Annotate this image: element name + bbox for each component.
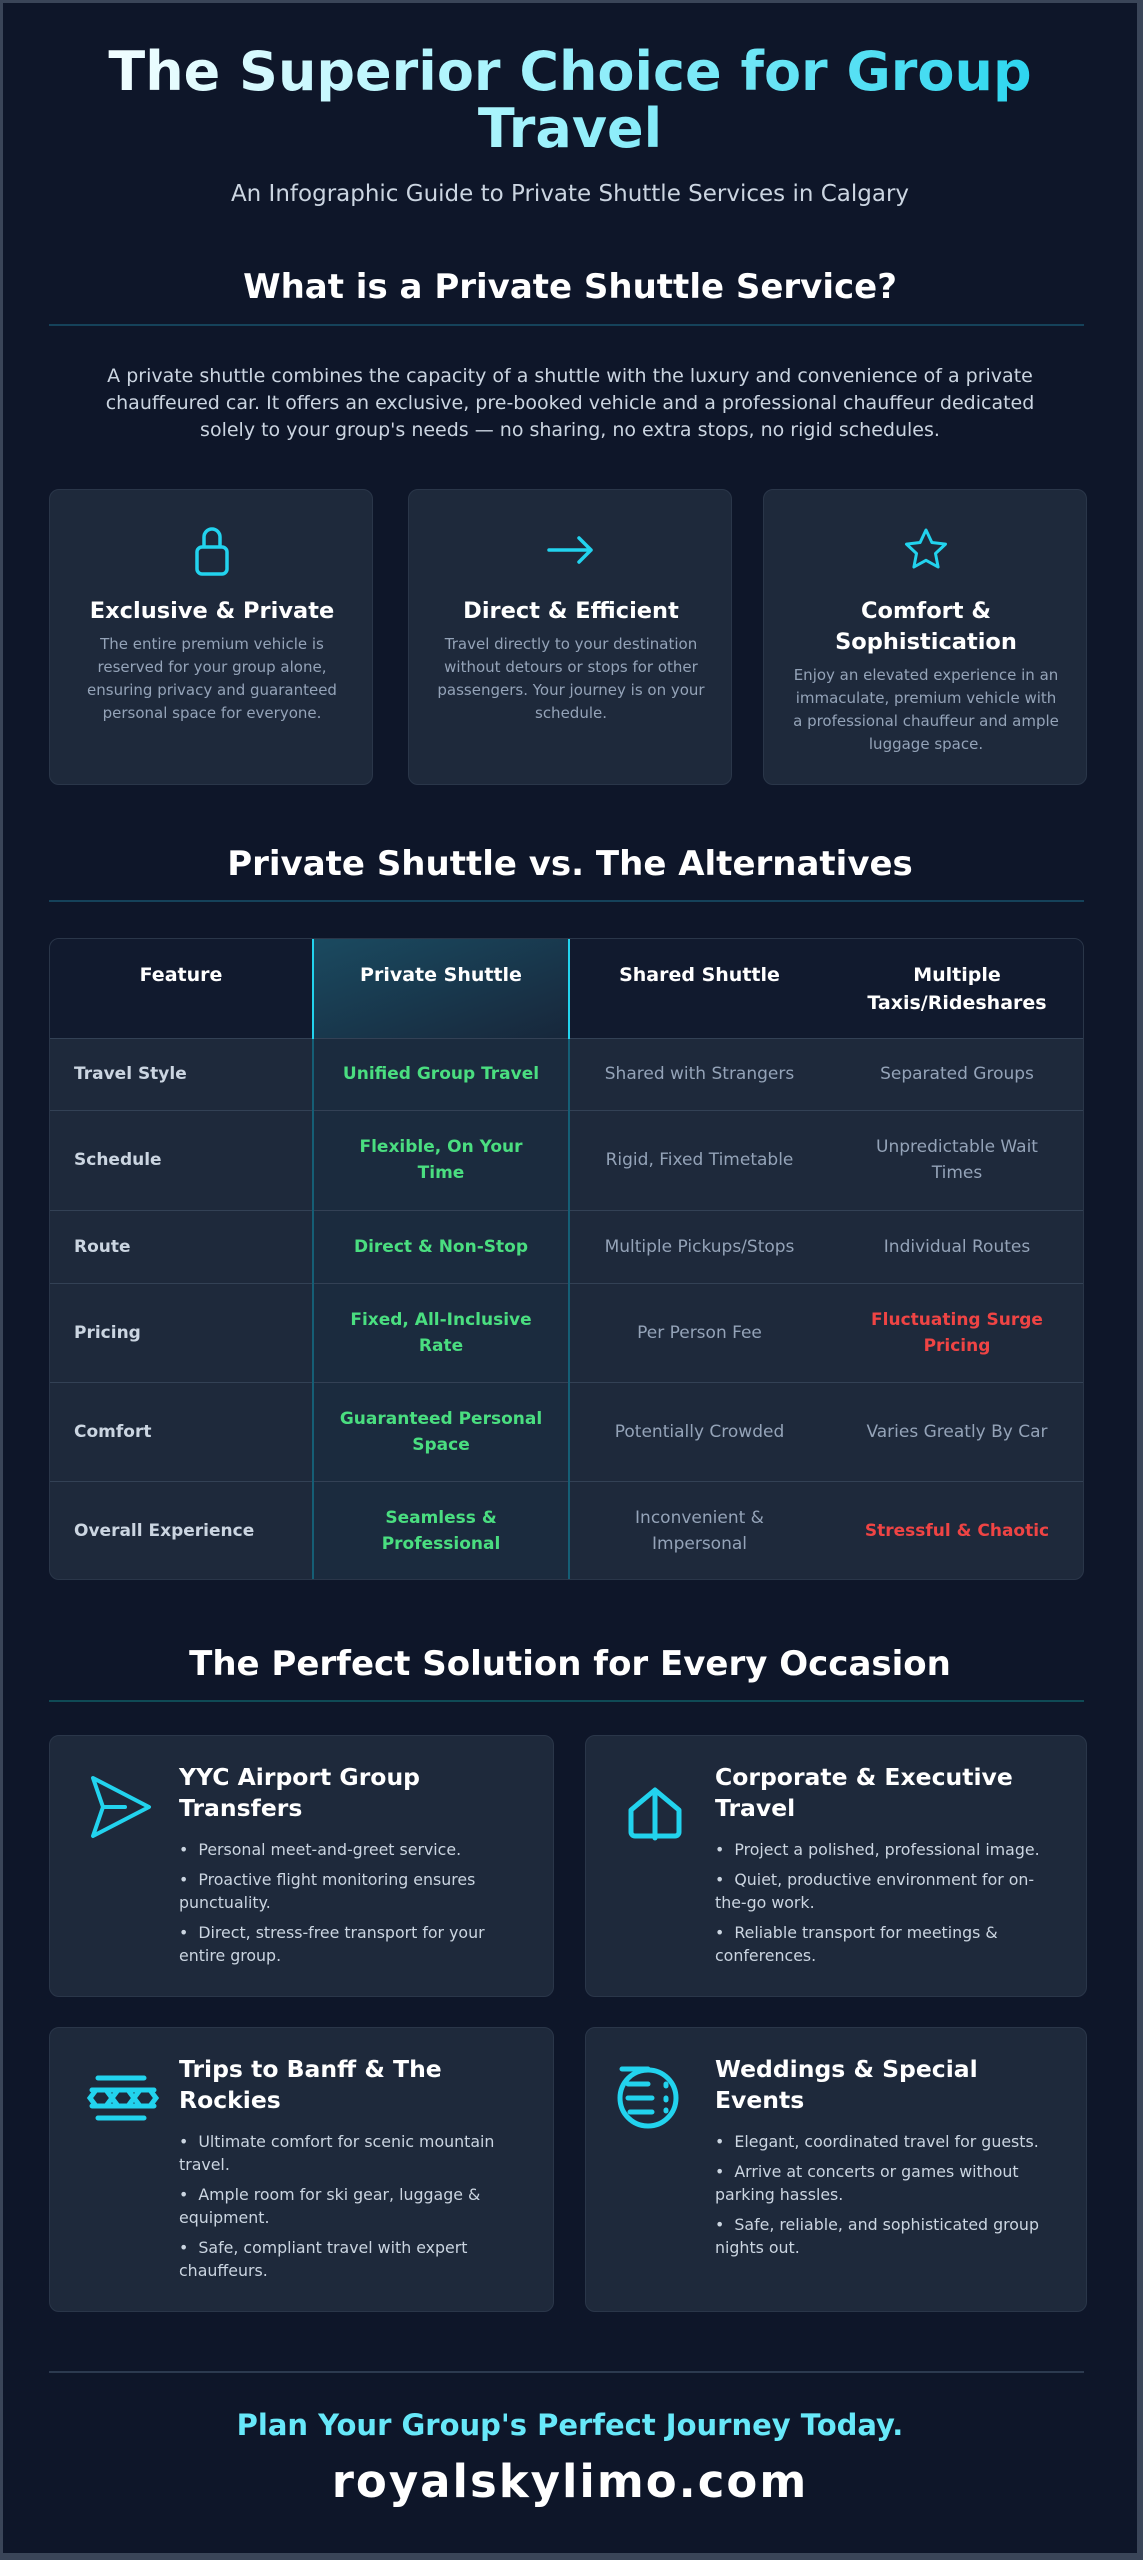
icon: paper plane: [90, 1776, 152, 1838]
comparison table: Overall Experience: [74, 1521, 254, 1541]
icon: lock: [195, 527, 229, 576]
bullets: • Project a polished, professional image.: [715, 1840, 1040, 1859]
panel: direct & efficient: [408, 489, 732, 785]
comparison table: Rigid, Fixed Timetable: [606, 1150, 793, 1170]
bullets: • Arrive at concerts or games without parking hassles.: [715, 2162, 1019, 2204]
icon: star: [904, 528, 947, 569]
comparison table: Direct & Non-Stop: [354, 1236, 528, 1256]
card text: Travel directly to your destination without detours or stops for other passengers. Your journey is on your schedule.: [437, 635, 705, 722]
comparison table: Individual Routes: [884, 1236, 1030, 1256]
comparison table: Stressful & Chaotic: [865, 1521, 1049, 1541]
icon: vehicle: [87, 2076, 159, 2120]
comparison table: Space: [412, 1434, 470, 1454]
comparison table: Professional: [382, 1534, 500, 1554]
comparison table: [49, 938, 1084, 1580]
title: [715, 2055, 978, 2114]
title: Travel: [715, 1794, 795, 1822]
title: Transfers: [179, 1794, 302, 1822]
comparison table: Flexible, On Your: [359, 1137, 523, 1157]
intro paragraph: A private shuttle combines the capacity of a shuttle with the luxury and convenience of a private chauffeured car. It offers an exclusive, pre-booked vehicle and a professional chauffeur dedicated solely to your group's needs — no sharing, no extra stops, no rigid schedules.: [106, 365, 1034, 441]
comparison table: Private Shuttle: [360, 964, 522, 986]
comparison table: Shared Shuttle: [619, 964, 780, 986]
comparison table: Route: [74, 1236, 131, 1256]
bullets: • Elegant, coordinated travel for guests.: [715, 2132, 1039, 2151]
comparison table: Times: [932, 1163, 982, 1183]
card text: [793, 598, 1059, 753]
heading: what is a private shuttle: What is a Private Shuttle Service?: [243, 267, 897, 307]
comparison table: Fluctuating Surge: [871, 1310, 1043, 1330]
bullets: [179, 1840, 485, 1965]
title: Weddings & Special: [715, 2055, 978, 2083]
title: Trips to Banff & The: [179, 2055, 442, 2083]
comparison table: Impersonal: [652, 1534, 747, 1554]
panel: airport transfers: [49, 1735, 554, 1997]
comparison table: Varies Greatly By Car: [866, 1422, 1048, 1442]
card text: Comfort &: [861, 598, 991, 624]
title: [715, 1763, 1013, 1822]
panel: comfort & sophistication: [763, 489, 1087, 785]
comparison table: Multiple Pickups/Stops: [605, 1236, 794, 1256]
comparison table: Unified Group Travel: [343, 1064, 539, 1084]
bullets: • Personal meet-and-greet service.: [179, 1840, 461, 1859]
title: YYC Airport Group: [179, 1763, 420, 1791]
bullets: [715, 1840, 1040, 1965]
title: [3, 43, 1137, 157]
bullets: • Quiet, productive environment for on-the-go work.: [715, 1870, 1034, 1912]
heading: occasions: The Perfect Solution for Every Occasion: [189, 1644, 951, 1684]
title: Travel: [478, 97, 662, 160]
title: The Superior Choice for Group: [108, 40, 1032, 103]
website url: royalskylimo.com: [332, 2455, 808, 2508]
bullets: • Ample room for ski gear, luggage & equipment.: [179, 2185, 480, 2227]
comparison table: Rate: [419, 1336, 463, 1356]
comparison table: Schedule: [74, 1150, 162, 1170]
card text: The entire premium vehicle is reserved for your group alone, ensuring privacy and guaranteed personal space for everyone.: [87, 635, 337, 722]
comparison table: Pricing: [924, 1336, 990, 1356]
panel: exclusive & private: [49, 489, 373, 785]
title: Events: [715, 2086, 804, 2114]
bullets: • Safe, compliant travel with expert chauffeurs.: [179, 2238, 467, 2280]
comparison table: Feature: [140, 964, 222, 986]
bullets: • Proactive flight monitoring ensures punctuality.: [179, 1870, 475, 1912]
title: Corporate & Executive: [715, 1763, 1013, 1791]
bullets: [715, 2132, 1039, 2257]
bullets: • Safe, reliable, and sophisticated group nights out.: [715, 2215, 1039, 2257]
bullets: [179, 2132, 494, 2280]
comparison table: Seamless &: [385, 1508, 497, 1528]
title: [179, 2055, 442, 2114]
comparison table: Potentially Crowded: [615, 1422, 784, 1442]
comparison table: Unpredictable Wait: [876, 1137, 1038, 1157]
comparison table: Per Person Fee: [637, 1322, 762, 1342]
heading: comparison: Private Shuttle vs. The Alternatives: [227, 844, 913, 884]
panel: corporate travel: [585, 1735, 1087, 1997]
comparison table: Multiple: [913, 964, 1001, 986]
card text: Enjoy an elevated experience in an immaculate, premium vehicle with a professional chauffeur and ample luggage space.: [793, 666, 1059, 753]
panel: banff trips: [49, 2027, 554, 2312]
comparison table: Taxis/Rideshares: [867, 992, 1047, 1014]
subtitle: An Infographic Guide to Private Shuttle Services in Calgary: [231, 181, 909, 207]
comparison table: Shared with Strangers: [605, 1064, 794, 1084]
comparison table: Inconvenient &: [635, 1508, 764, 1528]
card text: Exclusive & Private: [90, 598, 334, 624]
comparison table: Pricing: [74, 1322, 141, 1342]
comparison table: Time: [418, 1163, 464, 1183]
icon: list circle: [618, 2066, 678, 2128]
comparison table: Travel Style: [74, 1064, 187, 1084]
comparison table: Guaranteed Personal: [340, 1408, 542, 1428]
panel: weddings & events: [585, 2027, 1087, 2312]
call to action: Plan Your Group's Perfect Journey Today.: [237, 2408, 903, 2442]
bullets: • Direct, stress-free transport for your entire group.: [179, 1923, 485, 1965]
bullets: • Reliable transport for meetings & conferences.: [715, 1923, 998, 1965]
title: Rockies: [179, 2086, 281, 2114]
icon: umbrella/house: [628, 1787, 682, 1840]
card text: Sophistication: [835, 629, 1017, 655]
comparison table: Fixed, All-Inclusive: [350, 1310, 532, 1330]
comparison table: Comfort: [74, 1422, 151, 1442]
card text: Direct & Efficient: [463, 598, 679, 624]
comparison table: Separated Groups: [880, 1064, 1034, 1084]
icon: arrow: [547, 536, 593, 564]
title: [178, 1763, 420, 1822]
bullets: • Ultimate comfort for scenic mountain travel.: [179, 2132, 494, 2174]
